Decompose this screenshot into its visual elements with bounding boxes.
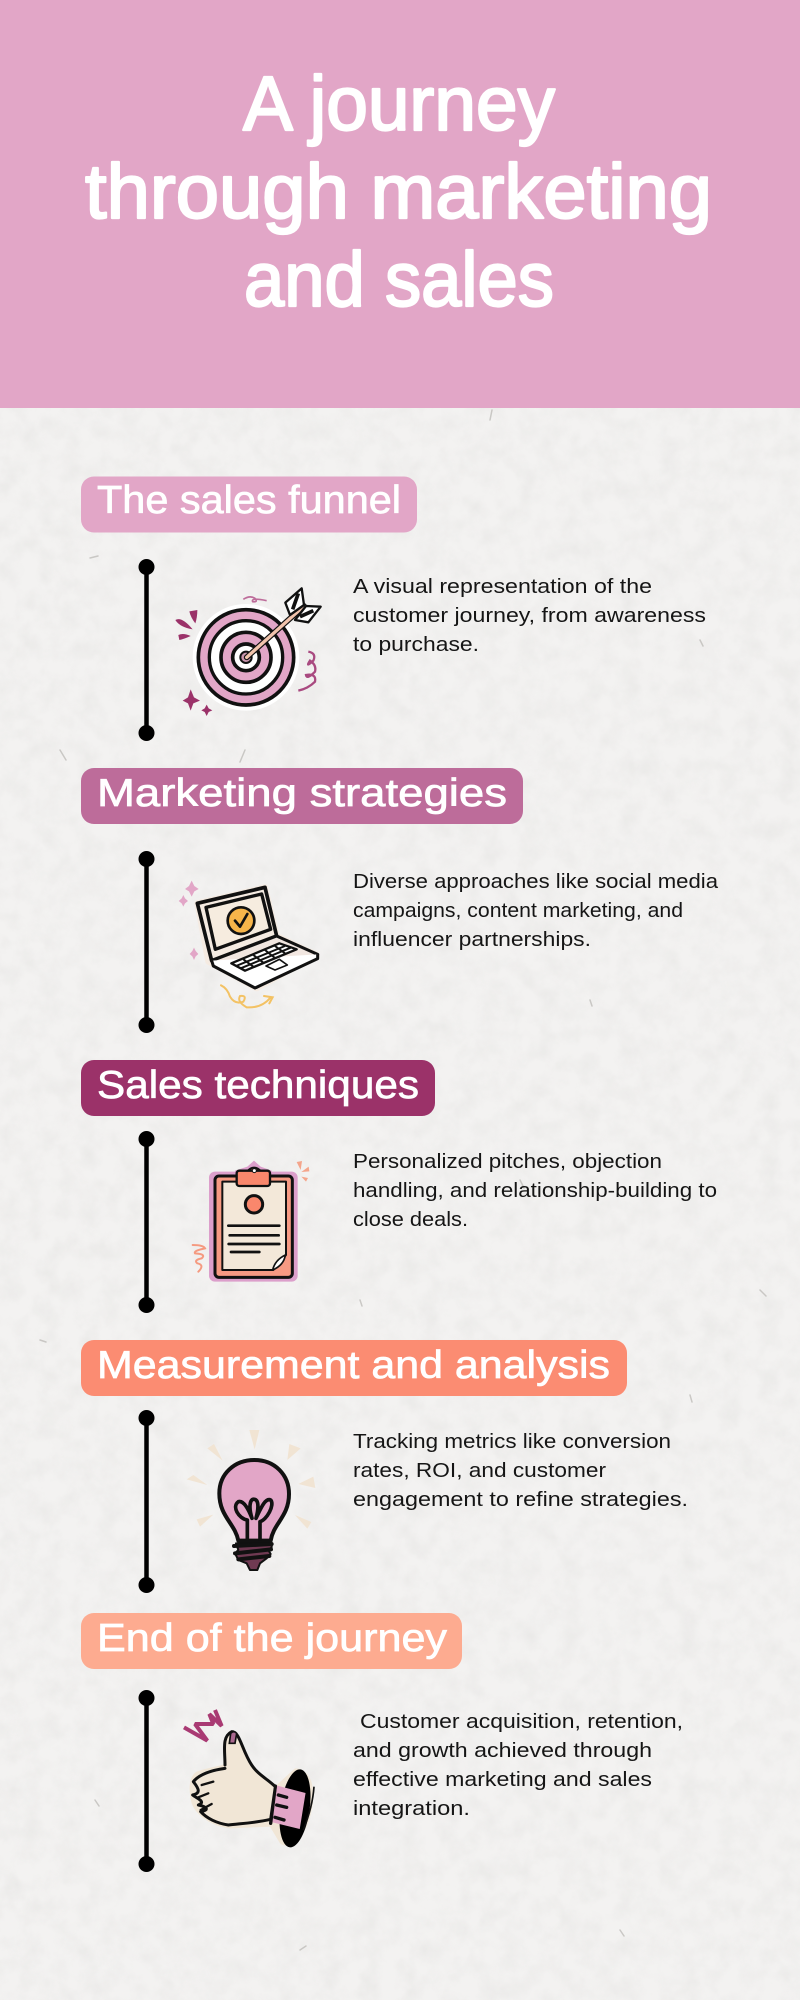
heading: the sales funnel — [81, 476, 417, 532]
description 4: Tracking metrics like conversion — [353, 1430, 671, 1453]
heading: end of the journey — [81, 1613, 462, 1669]
icon: clipboard document — [193, 1161, 309, 1282]
timeline connector 2 — [138, 851, 154, 1033]
icon: target with arrow — [175, 588, 321, 716]
heading: measurement and analysis: Measurement and analysis — [97, 1344, 610, 1387]
heading: end of the journey: End of the journey — [97, 1617, 448, 1660]
icon: light bulb — [187, 1430, 315, 1570]
heading: marketing strategies — [81, 768, 523, 824]
description 5 — [353, 1710, 683, 1820]
description 1: to purchase. — [353, 633, 479, 656]
header banner — [0, 0, 800, 408]
description 2: influencer partnerships. — [353, 928, 591, 951]
title: A journey — [243, 61, 555, 147]
title — [85, 61, 712, 323]
description 3: close deals. — [353, 1208, 468, 1231]
description 2: campaigns, content marketing, and — [353, 899, 683, 922]
heading: marketing strategies: Marketing strategies — [97, 772, 507, 815]
description 2 — [353, 870, 719, 951]
title: and sales — [244, 237, 554, 323]
timeline connector 5 — [138, 1690, 154, 1872]
timeline connector 4 — [138, 1410, 154, 1593]
section 1: the sales funnel — [81, 476, 706, 741]
icon: laptop with check mark — [179, 881, 318, 1007]
description 1 — [353, 575, 706, 656]
timeline connector 1 — [138, 559, 154, 741]
description 5: effective marketing and sales — [353, 1768, 652, 1791]
section 3: sales techniques — [81, 1060, 717, 1313]
title: through marketing — [85, 149, 712, 235]
description 4 — [353, 1430, 688, 1511]
section 4: measurement and analysis — [81, 1340, 688, 1593]
heading: measurement and analysis — [81, 1340, 627, 1396]
heading: the sales funnel: The sales funnel — [97, 479, 401, 522]
timeline connector 3 — [138, 1131, 154, 1313]
section 5: end of the journey — [81, 1613, 683, 1872]
description 5: and growth achieved through — [353, 1739, 652, 1762]
description 5: Customer acquisition, retention, — [360, 1710, 683, 1733]
heading: sales techniques — [81, 1060, 435, 1116]
description 3: Personalized pitches, objection — [353, 1150, 662, 1173]
description 5: integration. — [353, 1797, 470, 1820]
description 4: rates, ROI, and customer — [353, 1459, 606, 1482]
description 1: A visual representation of the — [353, 575, 652, 598]
description 4: engagement to refine strategies. — [353, 1488, 688, 1511]
description 3: handling, and relationship-building to — [353, 1179, 717, 1202]
description 1: customer journey, from awareness — [353, 604, 706, 627]
description 3 — [353, 1150, 717, 1231]
section 2: marketing strategies — [81, 768, 719, 1033]
description 2: Diverse approaches like social media — [353, 870, 719, 893]
icon: thumbs up — [184, 1710, 315, 1849]
heading: sales techniques: Sales techniques — [97, 1064, 419, 1107]
